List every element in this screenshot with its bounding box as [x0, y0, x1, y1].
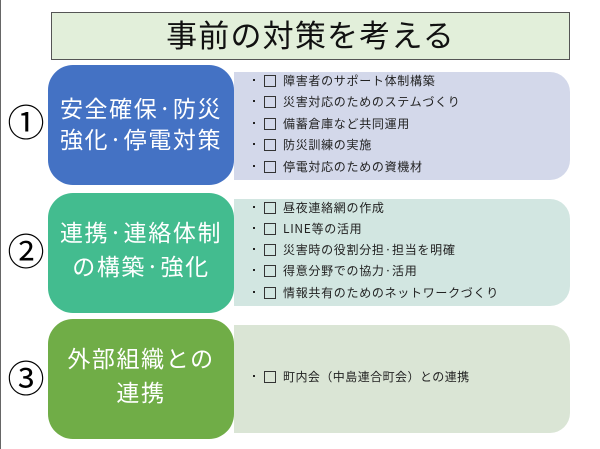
- item: 町内会（中島連合町会）との連携: 町内会（中島連合町会）との連携: [283, 368, 470, 385]
- item: 停電対応のための資機材: 停電対応のための資機材: [283, 158, 423, 175]
- item: 障害者のサポート体制構築: 障害者のサポート体制構築: [283, 72, 435, 89]
- panel: item list 2: [234, 199, 570, 306]
- title: 事前の対策を考える: [166, 11, 455, 56]
- item: 昼夜連絡網の作成: 昼夜連絡網の作成: [283, 199, 385, 216]
- box: 外部組織との連携: [48, 319, 234, 439]
- number 3: ③: [8, 349, 44, 403]
- item: LINE等の活用: LINE等の活用: [283, 220, 362, 237]
- title: [51, 12, 570, 60]
- item: 災害時の役割分担・担当を明確: 災害時の役割分担·担当を明確: [283, 241, 456, 258]
- box text line 2: 強化·停電対策: [60, 121, 222, 155]
- panel: item list 3: [234, 325, 570, 433]
- item: 備蓄倉庫など共同運用: 備蓄倉庫など共同運用: [283, 115, 410, 132]
- item: 情報共有のためのネットワークづくり: 情報共有のためのネットワークづくり: [283, 284, 499, 301]
- left vertical rule: [0, 0, 1, 449]
- box text line 1: 外部組織との: [67, 340, 215, 374]
- box text line 2: 連携: [116, 374, 166, 408]
- number 2: ②: [8, 222, 44, 276]
- item: 災害対応のためのステムづくり: 災害対応のためのステムづくり: [283, 93, 460, 110]
- number 1: ①: [8, 93, 44, 147]
- box: 連携・連絡体制の構築・強化: [48, 193, 234, 313]
- item: 得意分野での協力・活用: 得意分野での協力·活用: [283, 262, 417, 279]
- box text line 1: 安全確保·防災: [60, 90, 222, 124]
- box text line 2: の構築·強化: [72, 248, 210, 282]
- panel: item list 1: [234, 72, 570, 180]
- item: 防災訓練の実施: 防災訓練の実施: [283, 136, 372, 153]
- box: 安全確保・防災 強化・停電対策: [48, 65, 234, 185]
- box text line 1: 連携·連絡体制: [60, 214, 222, 248]
